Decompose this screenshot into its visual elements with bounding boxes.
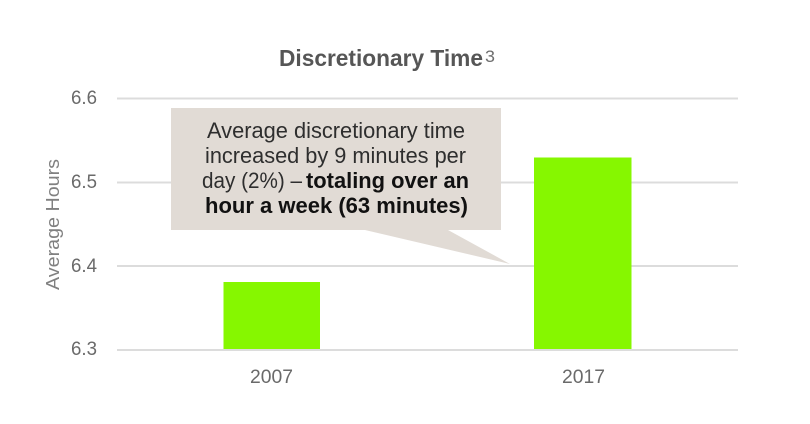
- bar: 2017: [534, 158, 632, 349]
- callout: [171, 108, 510, 264]
- callout text: increased by 9 minutes per: [205, 143, 466, 168]
- y-axis tick labels: 6.4: [71, 256, 97, 277]
- y-axis title: Average Hours: [43, 159, 63, 290]
- callout text: [202, 118, 469, 218]
- y-axis tick labels: 6.3: [71, 339, 97, 360]
- callout text: hour a week (63 minutes): [205, 193, 468, 218]
- x-axis labels: 2017: [562, 367, 605, 388]
- y-axis tick labels: [71, 88, 97, 360]
- chart title: 3: [485, 47, 495, 66]
- callout box with pointer: [171, 108, 510, 264]
- bar: 2007: [224, 282, 320, 349]
- chart title: Discretionary Time: [279, 45, 483, 71]
- callout text: Average discretionary time: [207, 118, 465, 143]
- x-axis labels: 2007: [250, 367, 293, 388]
- callout text: totaling over an: [306, 168, 469, 193]
- y-axis tick labels: 6.6: [71, 88, 97, 109]
- y-axis tick labels: 6.5: [71, 172, 97, 193]
- x-axis labels: [250, 367, 605, 388]
- callout text: day (2%) –: [202, 168, 303, 193]
